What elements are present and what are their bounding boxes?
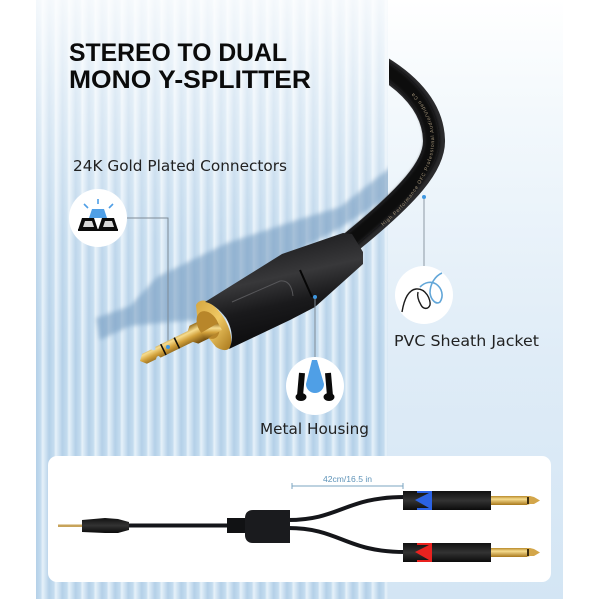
icon: gold bars [69,189,127,247]
plug pin [136,318,214,370]
label: PVC sheath jacket: PVC Sheath Jacket [394,332,539,350]
label: metal housing: Metal Housing [260,420,369,438]
split cables [128,497,405,552]
metal housing [205,233,363,349]
leader line: housing [314,299,316,357]
cable [344,58,446,248]
cable print text: High Performance OFC Professional Audio/Video Cable [381,93,434,226]
icon: PVC jacket [395,266,453,324]
red jack [403,543,540,562]
panel: striped background [36,0,388,599]
marker dots [166,195,426,349]
gold collar [196,301,231,350]
leader line: jacket [423,199,425,266]
label: gold plated connectors: 24K Gold Plated Connectors [73,157,287,175]
dimension label: 42cm/16.5 in [323,475,372,484]
cable shadow [96,166,392,340]
stereo plug [136,233,363,370]
blue jack [403,491,540,510]
leader line: gold connector [127,218,168,347]
dimension line [292,483,403,489]
panel: product card [48,456,551,582]
title [69,39,311,94]
small stereo plug [58,518,129,533]
splitter block [227,510,290,543]
title: STEREO TO DUAL [69,39,287,67]
title: MONO Y-SPLITTER [69,66,311,94]
icon: metal housing [286,357,344,415]
